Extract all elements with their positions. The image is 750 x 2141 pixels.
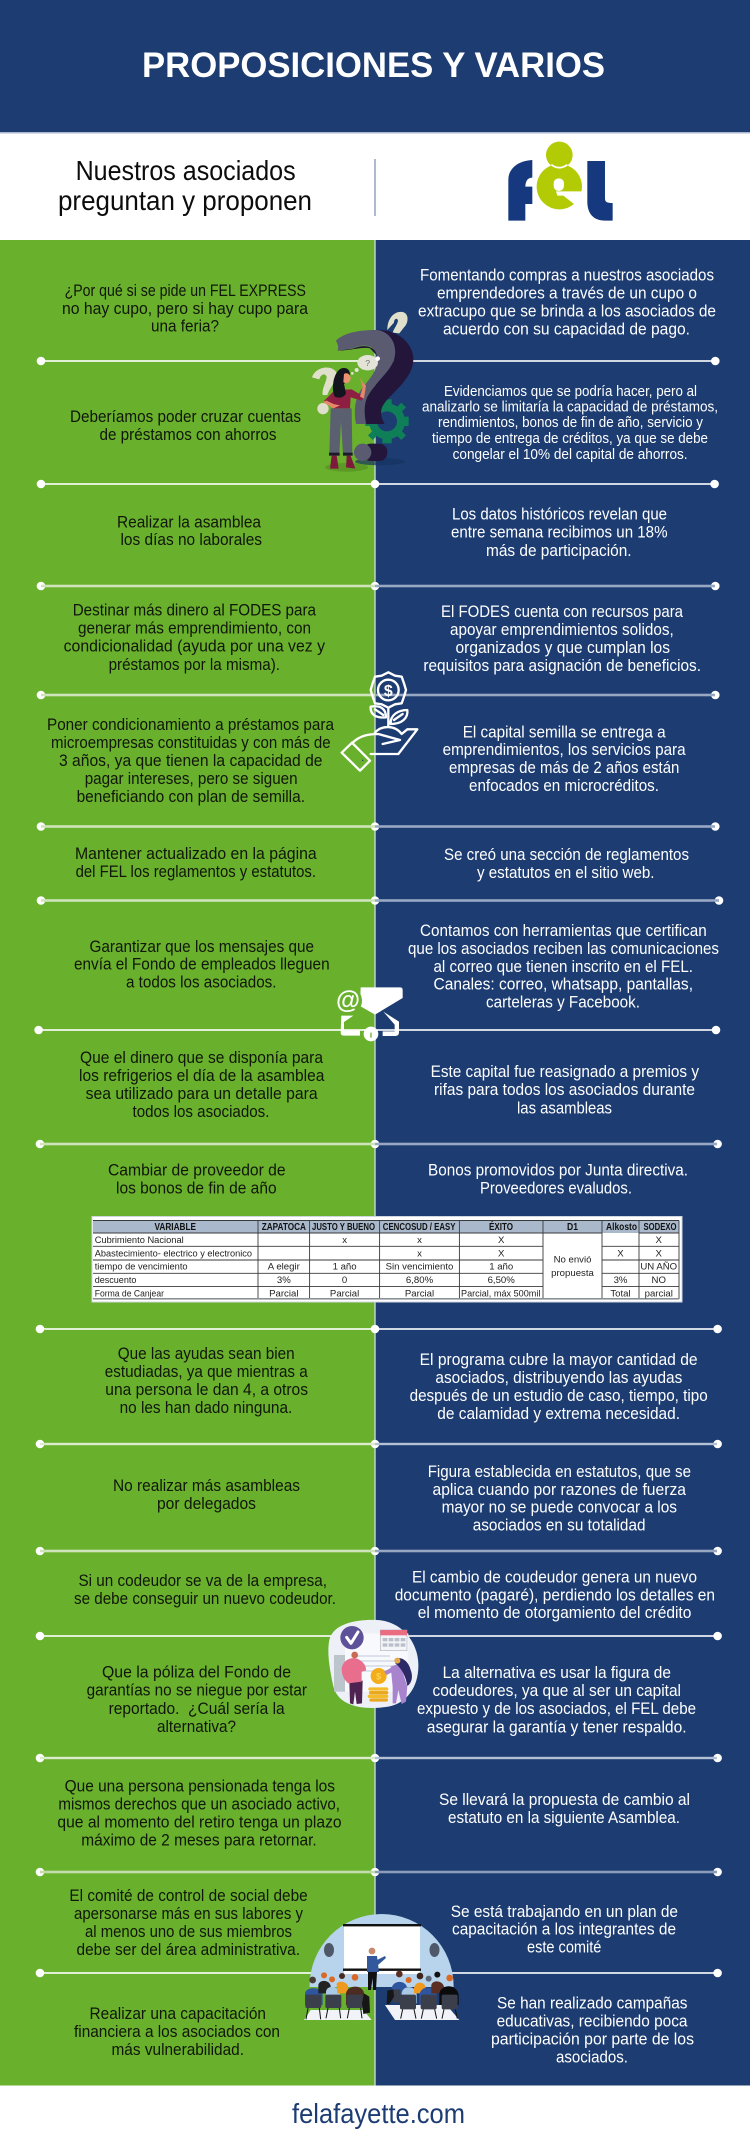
answer 3: más de participación. (486, 542, 632, 560)
question 5: pagar intereses, pero se siguen (85, 770, 298, 788)
table: bonus providers comparison: x (417, 1248, 422, 1259)
answer 10 (410, 1351, 708, 1423)
question 15: El comité de control de social debe (69, 1887, 308, 1905)
table: bonus providers comparison: Sin vencimiento (386, 1262, 453, 1273)
table: bonus providers comparison: D1 (567, 1222, 578, 1233)
answer 11: asociados en su totalidad (473, 1516, 646, 1534)
answer 4: El FODES cuenta con recursos para (441, 603, 684, 621)
answer 9: Bonos promovidos por Junta directiva. (428, 1162, 688, 1180)
question 3: Realizar la asamblea (117, 513, 262, 531)
question 13: garantías no se niegue por estar (87, 1682, 307, 1700)
table: bonus providers comparison: Alkosto (606, 1222, 637, 1233)
question 7: a todos los asociados. (126, 974, 276, 992)
table: bonus providers comparison: propuesta (551, 1268, 594, 1279)
title: PROPOSICIONES Y VARIOS (142, 46, 605, 85)
table: bonus providers comparison: VARIABLE (154, 1222, 196, 1233)
question 14: máximo de 2 meses para retornar. (81, 1831, 317, 1849)
question 9: los bonos de fin de año (116, 1180, 277, 1198)
answer 8 (431, 1063, 700, 1118)
answer 7: al correo que tienen inscrito en el FEL. (434, 958, 693, 976)
question 12: Si un codeudor se va de la empresa, (78, 1572, 327, 1590)
answer 7: Contamos con herramientas que certifican (420, 922, 707, 940)
answer 9: Proveedores evaludos. (480, 1180, 632, 1198)
table: bonus providers comparison: tiempo de vencimiento (95, 1262, 188, 1273)
table: bonus providers comparison: NO (652, 1275, 666, 1286)
question 5: beneficiando con plan de semilla. (77, 788, 305, 806)
illustration: audience at a presentation (304, 1914, 459, 2020)
question 16: financiera a los asociados con (74, 2023, 280, 2041)
question 4: condicionalidad (ayuda por una vez y (64, 638, 326, 656)
question 10: estudiadas, ya que mientras a (105, 1363, 308, 1381)
panel: answers (navy) (375, 240, 750, 2086)
answer 16: Se han realizado campañas (497, 1995, 688, 2013)
question 10: Que las ayudas sean bien (118, 1345, 295, 1363)
question 11: por delegados (157, 1495, 256, 1513)
answer 9 (428, 1162, 688, 1198)
question 13 (87, 1664, 307, 1736)
question 11: No realizar más asambleas (113, 1477, 300, 1495)
table: bonus providers comparison: Parcial (405, 1288, 434, 1299)
table: bonus providers comparison: CENCOSUD / EASY (383, 1222, 456, 1233)
footer: website: felafayette.com (292, 2098, 465, 2129)
table: bonus providers comparison: 1 año (333, 1262, 357, 1273)
question 7 (74, 938, 330, 992)
table: bonus providers comparison: X (656, 1235, 663, 1246)
question 12: se debe conseguir un nuevo codeudor. (74, 1590, 336, 1608)
answer 15: este comité (527, 1939, 601, 1957)
answer 14: estatuto en la siguiente Asamblea. (448, 1809, 680, 1827)
question 2 (70, 408, 301, 444)
answer 4: organizados y que cumplan los (456, 639, 670, 657)
answer 7: Canales: correo, whatsapp, pantallas, (434, 976, 693, 994)
answer 13 (417, 1664, 696, 1736)
question 10 (105, 1345, 308, 1417)
heading: nuestros asociados preguntan y proponen (58, 155, 312, 216)
answer 13: expuesto y de los asociados, el FEL debe (417, 1700, 696, 1718)
question 15: apersonarse más en sus labores y (74, 1905, 304, 1923)
question 8: sea utilizado para un detalle para (86, 1085, 318, 1103)
answer 16: participación por parte de los (491, 2030, 694, 2048)
question 1: no hay cupo, pero si hay cupo para (62, 300, 309, 318)
table: bonus providers comparison: descuento (95, 1275, 136, 1286)
question 4: Destinar más dinero al FODES para (73, 602, 317, 620)
question 14: Que una persona pensionada tenga los (65, 1778, 335, 1796)
illustration: two people with calendar and coins: $ (376, 1671, 382, 1681)
question 14: que al momento del retiro tenga un plazo (57, 1814, 342, 1832)
answer 5: empresas de más de 2 años están (449, 759, 679, 777)
answer 10: después de un estudio de caso, tiempo, tipo (410, 1387, 708, 1405)
answer 6: Se creó una sección de reglamentos (444, 846, 689, 864)
table: bonus providers comparison (92, 1216, 682, 1302)
table: bonus providers comparison: X (498, 1248, 505, 1259)
icon: envelope with at sign: @ (336, 988, 360, 1015)
question 15 (69, 1887, 308, 1959)
answer 1: extracupo que se brinda a los asociados de (418, 303, 716, 321)
table: bonus providers comparison: 6,50% (488, 1275, 515, 1286)
logo: FEL (508, 142, 613, 221)
table: bonus providers comparison: X (498, 1235, 505, 1246)
answer 5: emprendimientos, los servicios para (443, 741, 686, 759)
question 14: mismos derechos que un asociado activo, (58, 1796, 340, 1814)
question 5: Poner condicionamiento a préstamos para (47, 716, 335, 734)
table: bonus providers comparison: 6,80% (406, 1275, 434, 1286)
answer 7 (408, 922, 719, 1012)
table: bonus providers comparison: JUSTO Y BUENO (312, 1222, 375, 1233)
question 14 (57, 1778, 342, 1849)
question 13: alternativa? (157, 1718, 236, 1736)
table: bonus providers comparison: Abastecimiento- electrico y electronico (95, 1248, 252, 1259)
answer 8: rifas para todos los asociados durante (434, 1081, 695, 1099)
table: bonus providers comparison: Parcial (330, 1288, 359, 1299)
question 8: los refrigerios el día de la asamblea (79, 1067, 325, 1085)
icon: hand with money plant (342, 672, 417, 771)
answer 12: El cambio de coudeudor genera un nuevo (412, 1568, 697, 1586)
answer 3: Los datos históricos revelan que (452, 506, 667, 524)
table: bonus providers comparison: X (656, 1248, 663, 1259)
answer 13: asegurar la garantía y tener respaldo. (427, 1718, 687, 1736)
answer 16: asociados. (556, 2048, 628, 2066)
answer 14: Se llevará la propuesta de cambio al (439, 1791, 690, 1809)
table: bonus providers comparison: x (342, 1235, 347, 1246)
table: bonus providers comparison: UN AÑO (640, 1262, 677, 1273)
question 6 (75, 845, 317, 881)
question 13: Que la póliza del Fondo de (102, 1664, 291, 1682)
question 16: más vulnerabilidad. (112, 2041, 244, 2059)
answer 1: emprendedores a través de un cupo o (437, 285, 697, 303)
table: bonus providers comparison: Forma de Canjear (95, 1288, 165, 1299)
question 8: Que el dinero que se disponía para (80, 1049, 324, 1067)
answer 2: congelar el 10% del capital de ahorros. (453, 447, 688, 463)
answer 2: Evidenciamos que se podría hacer, pero al (444, 384, 697, 400)
table: bonus providers comparison: 3% (614, 1275, 628, 1286)
question 15: debe ser del área administrativa. (76, 1941, 300, 1959)
answer 11: Figura establecida en estatutos, que se (428, 1463, 691, 1481)
answer 11: mayor no se puede convocar a los (442, 1499, 677, 1517)
heading: nuestros asociados preguntan y proponen: Nuestros asociados (76, 155, 296, 186)
question 6: del FEL los reglamentos y estatutos. (76, 863, 316, 881)
answer 3: entre semana recibimos un 18% (451, 524, 668, 542)
answer 4 (423, 603, 701, 675)
illustration: woman with question marks (312, 312, 413, 472)
table: bonus providers comparison: A elegir (268, 1262, 301, 1273)
answer 16 (491, 1995, 694, 2066)
panel: title band (0, 0, 750, 134)
answer 1: acuerdo con su capacidad de pago. (443, 320, 690, 338)
question 16 (74, 2005, 280, 2059)
answer 3 (451, 506, 668, 560)
illustration: woman with question marks: ? (365, 358, 370, 368)
answer 2 (422, 384, 718, 463)
answer 8: Este capital fue reasignado a premios y (431, 1063, 700, 1081)
answer 15 (451, 1903, 678, 1957)
answer 7: que los asociados reciben las comunicaciones (408, 940, 719, 958)
answer 12: el momento de otorgamiento del crédito (418, 1604, 691, 1622)
question 15: al menos uno de sus miembros (85, 1923, 292, 1941)
question 7: envía el Fondo de empleados lleguen (74, 956, 330, 974)
question 12 (74, 1572, 336, 1608)
answer 12: documento (pagaré), perdiendo los detalles en (395, 1586, 715, 1604)
answer 2: rendimientos, bonos de fin de año, servicio y (438, 415, 704, 431)
question 9 (108, 1162, 286, 1198)
question 2: Deberíamos poder cruzar cuentas (70, 408, 301, 426)
question 9: Cambiar de proveedor de (108, 1162, 286, 1180)
answer 10: El programa cubre la mayor cantidad de (420, 1351, 698, 1369)
answer 11 (428, 1463, 691, 1534)
table: bonus providers comparison: X (617, 1248, 624, 1259)
answer 1 (418, 267, 716, 338)
question 2: de préstamos con ahorros (100, 426, 276, 444)
answer 10: asociados, distribuyendo las ayudas (435, 1369, 682, 1387)
question 6: Mantener actualizado en la página (75, 845, 317, 863)
question 4: generar más emprendimiento, con (78, 620, 311, 638)
question 13: reportado. ¿Cuál sería la (109, 1700, 285, 1718)
answer 16: educativas, recibiendo poca (497, 2012, 688, 2030)
question 16: Realizar una capacitación (90, 2005, 266, 2023)
answer 2: tiempo de entrega de créditos, ya que se debe (432, 431, 708, 447)
table: bonus providers comparison: parcial (645, 1288, 673, 1299)
answer 13: codeudores, ya que al ser un capital (432, 1682, 681, 1700)
question 4 (64, 602, 326, 674)
answer 4: requisitos para asignación de beneficios. (423, 657, 701, 675)
question 8 (79, 1049, 325, 1121)
answer 15: Se está trabajando en un plan de (451, 1903, 678, 1921)
question 4: préstamos por la misma). (109, 656, 280, 674)
question 3: los días no laborales (120, 531, 262, 549)
question 1: ¿Por qué si se pide un FEL EXPRESS (65, 282, 306, 300)
answer 6: y estatutos en el sitio web. (477, 864, 654, 882)
question 1: una feria? (151, 318, 219, 336)
table: bonus providers comparison: No envió (554, 1255, 591, 1266)
question 5: 3 años, ya que tienen la capacidad de (59, 752, 322, 770)
question 10: una persona le dan 4, a otros (105, 1381, 308, 1399)
table: bonus providers comparison: Cubrimiento Nacional (95, 1235, 184, 1246)
heading: nuestros asociados preguntan y proponen: preguntan y proponen (58, 185, 312, 216)
icon: hand with money plant: $ (384, 683, 393, 700)
answer 14 (439, 1791, 690, 1827)
question 5: microempresas constituidas y con más de (51, 734, 331, 752)
answer 4: apoyar emprendimientos solidos, (450, 621, 674, 639)
table: bonus providers comparison: Parcial (269, 1288, 298, 1299)
panel: questions (green) (0, 240, 375, 2086)
answer 8: las asambleas (517, 1100, 612, 1118)
illustration: two people with calendar and coins (328, 1620, 418, 1708)
answer 2: analizarlo se limitaría la capacidad de préstamos, (422, 400, 718, 416)
icon: envelope with at sign (334, 987, 403, 1041)
answer 5 (443, 724, 686, 795)
answer 11: aplica cuando por razones de fuerza (432, 1481, 687, 1499)
answer 1: Fomentando compras a nuestros asociados (420, 267, 714, 285)
table: bonus providers comparison: 3% (277, 1275, 291, 1286)
table: bonus providers comparison: Total (610, 1288, 631, 1299)
answer 12 (395, 1568, 715, 1622)
answer 5: El capital semilla se entrega a (463, 724, 666, 742)
table: bonus providers comparison: Parcial, máx 500mil (461, 1288, 540, 1299)
question 3 (117, 513, 262, 549)
table: bonus providers comparison: x (417, 1235, 422, 1246)
question 7: Garantizar que los mensajes que (90, 938, 314, 956)
answer 15: capacitación a los integrantes de (452, 1921, 676, 1939)
table: bonus providers comparison: SODEXO (644, 1222, 677, 1233)
table: bonus providers comparison: 0 (342, 1275, 347, 1286)
question 10: no les han dado ninguna. (120, 1399, 292, 1417)
question 1 (62, 282, 309, 336)
table: bonus providers comparison: 1 año (489, 1262, 513, 1273)
answer 6 (444, 846, 689, 882)
question 8: todos los asociados. (132, 1103, 269, 1121)
question 5 (47, 716, 335, 806)
table: bonus providers comparison: ÉXITO (489, 1221, 513, 1233)
answer 10: de calamidad y extrema necesidad. (437, 1405, 680, 1423)
answer 5: enfocados en microcréditos. (469, 777, 659, 795)
answer 13: La alternativa es usar la figura de (443, 1664, 671, 1682)
answer 7: carteleras y Facebook. (486, 994, 640, 1012)
table: bonus providers comparison: ZAPATOCA (262, 1222, 306, 1233)
question 11 (113, 1477, 300, 1513)
